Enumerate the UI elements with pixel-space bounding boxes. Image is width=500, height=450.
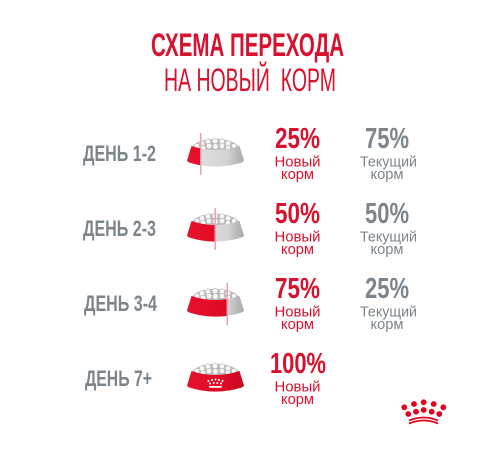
current food share: [360, 273, 417, 333]
new food share: Новый: [274, 304, 320, 320]
new food share: Новый: [274, 378, 320, 396]
current food share: Текущий: [360, 304, 417, 320]
row: day 2-3: [83, 198, 417, 258]
current food share: корм: [370, 316, 404, 333]
new food share: 50%: [275, 198, 320, 230]
heading: subtitle: НА НОВЫЙ КОРМ: [164, 62, 336, 98]
new food share: [270, 348, 326, 408]
new food share: корм: [281, 316, 314, 333]
icon: bowl 75 percent: [187, 283, 244, 325]
new food share: [274, 198, 320, 258]
icon: bowl 25 percent: [187, 133, 244, 175]
row: day 1-2: [83, 123, 417, 183]
day label: ДЕНЬ 7+: [85, 366, 152, 391]
new food share: [274, 273, 320, 333]
new food share: 100%: [270, 348, 326, 380]
new food share: 75%: [275, 273, 320, 305]
row: day 7+: [85, 348, 326, 408]
day label: ДЕНЬ 1-2: [83, 141, 156, 166]
current food share: корм: [370, 241, 404, 258]
icon: Royal Canin crown logo: [401, 399, 446, 424]
new food share: Новый: [274, 228, 320, 246]
title: [151, 27, 344, 98]
current food share: корм: [370, 166, 404, 183]
current food share: Текущий: [360, 154, 417, 170]
icon: full red bowl with crown: [187, 363, 244, 392]
current food share: 75%: [365, 123, 409, 155]
new food share: корм: [281, 166, 314, 183]
current food share: [360, 123, 417, 183]
heading: main title: СХЕМА ПЕРЕХОДА: [151, 27, 344, 63]
new food share: корм: [281, 241, 314, 258]
current food share: Текущий: [360, 228, 417, 246]
icon: bowl 50 percent: [187, 208, 244, 250]
current food share: 25%: [365, 273, 409, 305]
new food share: корм: [281, 391, 314, 408]
new food share: 25%: [275, 123, 320, 155]
current food share: 50%: [365, 198, 409, 230]
day label: ДЕНЬ 3-4: [84, 291, 158, 316]
new food share: Новый: [274, 154, 320, 170]
row: day 3-4: [84, 273, 417, 333]
new food share: [274, 123, 320, 183]
day label: ДЕНЬ 2-3: [83, 216, 156, 241]
current food share: [360, 198, 417, 258]
